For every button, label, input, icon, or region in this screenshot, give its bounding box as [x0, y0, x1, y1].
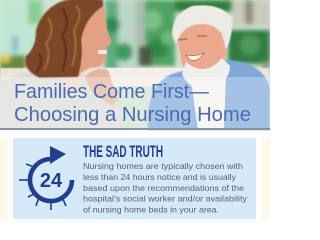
old woman: face — [177, 24, 228, 77]
photo background: garden — [0, 0, 270, 78]
woman: hair — [25, 0, 103, 78]
title — [14, 80, 251, 126]
icon: 24 hours clock arrow: 24 — [40, 170, 63, 192]
body text: based upon the recommendations of the — [83, 183, 244, 193]
panel: the sad truth — [13, 138, 256, 219]
old woman: white shirt — [190, 74, 226, 130]
woman: face — [79, 6, 112, 74]
old woman: smile — [186, 53, 204, 60]
woman: sweater — [0, 69, 122, 130]
old woman: collar — [182, 58, 230, 88]
title: Choosing a Nursing Home — [14, 103, 251, 126]
title: Families Come First— — [14, 80, 209, 103]
body text — [83, 161, 248, 214]
body text: of nursing home beds in your area. — [83, 204, 219, 214]
old woman: cardigan — [148, 60, 270, 130]
icon: 24 hours clock arrow — [19, 146, 72, 210]
old woman: hair — [172, 5, 232, 50]
right cream strip — [262, 138, 270, 220]
body text: hospital’s social worker and/or availability — [83, 194, 248, 204]
woman: hair curls — [36, 6, 80, 72]
woman: hand — [85, 69, 118, 106]
table — [0, 68, 270, 80]
heading: THE SAD TRUTH — [83, 143, 163, 161]
body text: Nursing homes are typically chosen with — [83, 161, 243, 171]
title band overlay — [0, 77, 270, 128]
body text: less than 24 hours notice and is usually — [83, 172, 237, 182]
header photo: two women laughing — [0, 0, 270, 130]
woman: V neck — [62, 76, 84, 104]
left cream strip — [0, 138, 7, 220]
old woman: eyes — [178, 36, 207, 40]
